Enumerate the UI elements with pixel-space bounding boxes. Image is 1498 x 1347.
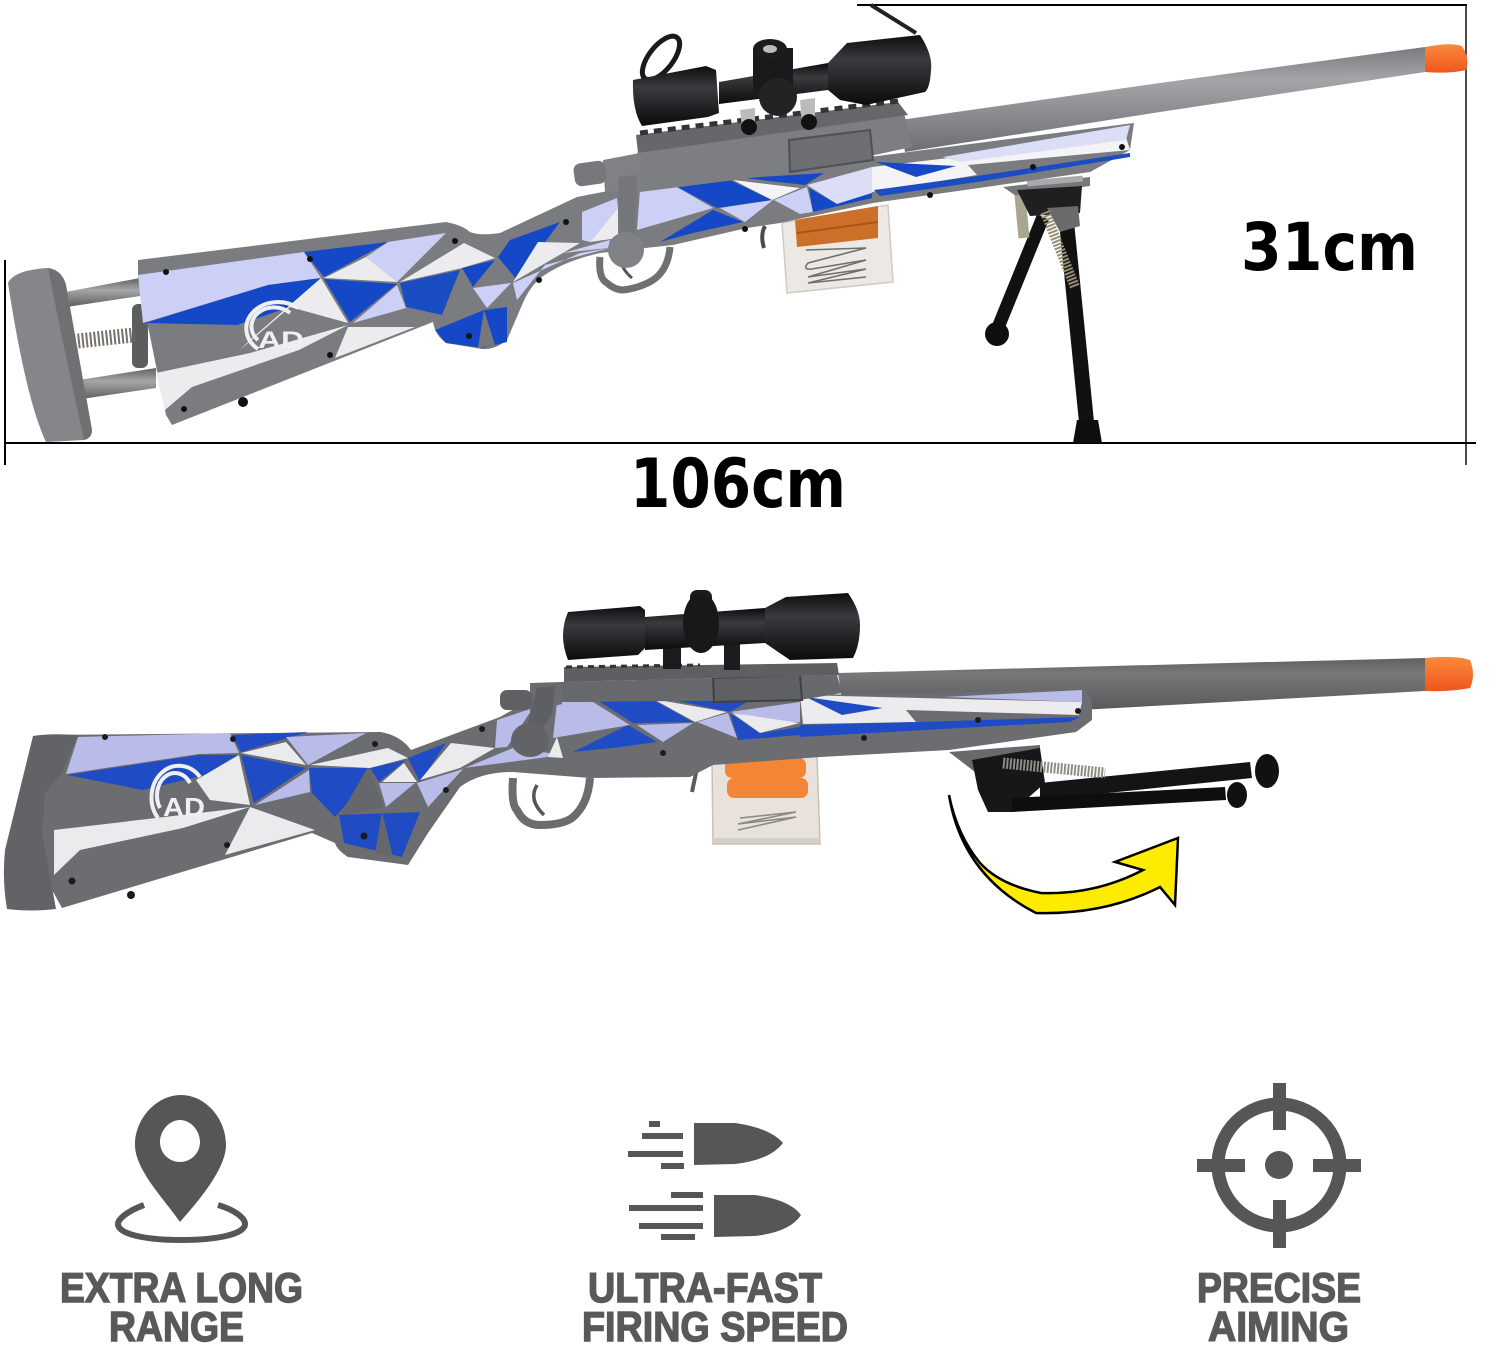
icon: folded bipod	[949, 745, 1279, 812]
feature: precise aiming	[1197, 1083, 1361, 1347]
icon: bolt handle	[608, 175, 644, 268]
icon: bipod standing	[985, 176, 1102, 443]
stock body	[30, 690, 1092, 908]
icon: rifle scope	[563, 590, 860, 670]
icon: brand logo: AD	[163, 792, 205, 822]
dimension label: length: 106cm	[630, 445, 846, 524]
dimension lines	[5, 5, 1476, 465]
receiver and bolt	[500, 663, 842, 713]
icon: magazine	[782, 205, 893, 293]
barrel	[838, 658, 1425, 710]
stock body	[138, 123, 1134, 425]
label: ULTRA-FAST	[588, 1264, 822, 1311]
icon: orange muzzle tip	[1425, 44, 1467, 73]
receiver and bolt	[573, 101, 912, 192]
icon: magazine	[712, 755, 820, 844]
icon: brand logo	[151, 766, 205, 822]
icon: rifle scope with open caps	[633, 5, 931, 135]
label	[582, 1264, 848, 1347]
rifle with extended stock and deployed bipod	[8, 5, 1467, 443]
stock camouflage pattern	[54, 690, 1082, 875]
icon: speeding bullets	[628, 1121, 801, 1240]
rifle with folded bipod	[4, 590, 1473, 910]
barrel	[900, 47, 1425, 152]
icon: extendable stock rods and butt plate	[8, 268, 156, 442]
icon: butt pad	[4, 734, 78, 910]
stock camouflage pattern	[138, 125, 1130, 410]
label: PRECISE	[1197, 1264, 1361, 1311]
icon: bolt handle	[511, 686, 555, 757]
icon: brand logo	[246, 302, 304, 354]
dimension label: height: 31cm	[1241, 209, 1418, 286]
feature: extra long range	[60, 1095, 303, 1347]
icon: orange muzzle tip	[1425, 657, 1473, 691]
icon: trigger guard	[512, 768, 697, 825]
icon: trigger guard	[600, 226, 765, 290]
yellow curved arrow	[949, 795, 1178, 913]
label	[60, 1264, 303, 1347]
icon: brand logo: AD	[258, 327, 304, 354]
icon: location pin	[118, 1095, 245, 1240]
label	[1197, 1264, 1361, 1347]
icon: crosshair	[1197, 1083, 1361, 1248]
stock screw holes	[68, 708, 1081, 899]
label: EXTRA LONG	[60, 1264, 303, 1311]
feature: ultra-fast firing speed	[582, 1121, 848, 1347]
stock screw holes	[163, 144, 1125, 412]
